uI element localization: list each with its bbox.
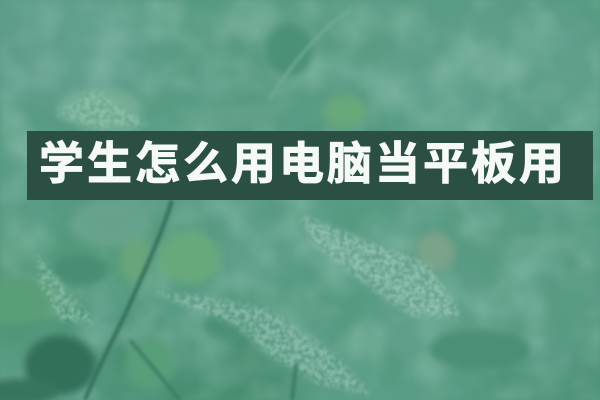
soft leaf bodies: [300, 215, 462, 318]
speckled leaf highlights: [300, 215, 462, 318]
title band: [27, 131, 593, 200]
stems: [85, 200, 172, 400]
title text: 学生怎么用电脑当平板用: [39, 138, 567, 189]
